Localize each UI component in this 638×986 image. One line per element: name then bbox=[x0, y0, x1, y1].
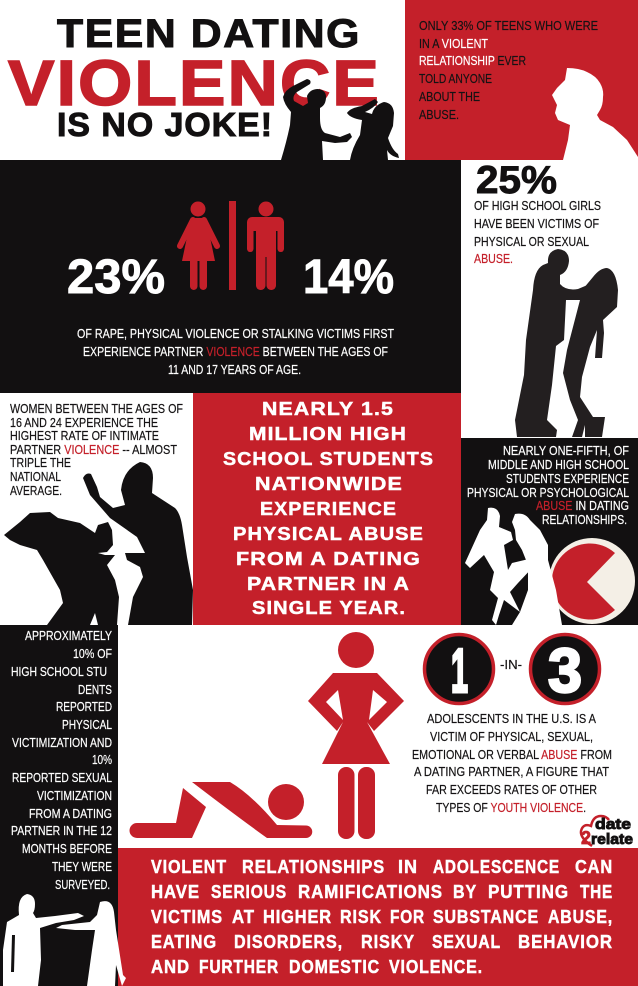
text: violent relationships conclusion: SEXUAL bbox=[432, 931, 501, 952]
text: violent relationships conclusion: DOMESTIC bbox=[289, 956, 380, 977]
text: approximately 10 percent bbox=[11, 629, 113, 892]
panel: 25 percent of girls bbox=[474, 159, 618, 437]
panel: conclusion bbox=[118, 848, 638, 986]
text: approximately 10 percent: 10% bbox=[92, 753, 112, 767]
text: violent relationships conclusion: VIOLENCE. bbox=[389, 956, 483, 977]
text: violent relationships conclusion: RAMIFICATIONS bbox=[298, 881, 443, 902]
text: approximately 10 percent: PHYSICAL bbox=[62, 718, 112, 732]
text: first experience ages: 11 AND 17 YEARS OF AGE. bbox=[168, 363, 301, 377]
divider bar bbox=[229, 201, 236, 290]
text: violent relationships conclusion: VICTIMS bbox=[151, 906, 223, 927]
text: only 33 percent told: IN A VIOLENT bbox=[419, 37, 488, 51]
silhouette: man grabbing woman bbox=[515, 249, 600, 437]
text: 1.5 million students: NEARLY 1.5 bbox=[262, 398, 394, 419]
text: violent relationships conclusion: HAVE bbox=[151, 881, 200, 902]
icon: standing woman bbox=[308, 632, 404, 839]
heading: teen dating: TEEN DATING bbox=[57, 12, 361, 56]
text: violent relationships conclusion: CAN bbox=[575, 856, 613, 877]
text: violent relationships conclusion: DISORDERS, bbox=[234, 931, 343, 952]
text: violent relationships conclusion: RELATIONSHIPS bbox=[242, 856, 385, 877]
text: adolescents: TYPES OF YOUTH VIOLENCE. bbox=[436, 801, 586, 815]
text: 1.5 million students: FROM A DATING bbox=[236, 548, 421, 569]
silhouette: man striking bbox=[83, 462, 193, 625]
logo: date2relate bbox=[581, 816, 633, 848]
panel: only 33 percent bbox=[405, 0, 638, 160]
text: violent relationships conclusion: AT bbox=[232, 906, 255, 927]
text: violent relationships conclusion: SERIOUS bbox=[211, 881, 287, 902]
text: 1.5 million students: SCHOOL STUDENTS bbox=[223, 448, 434, 469]
text: only 33 percent told: ABUSE. bbox=[419, 108, 459, 122]
panel: women 16 to 24 bbox=[4, 402, 193, 625]
text: approximately 10 percent: VICTIMIZATION bbox=[37, 789, 112, 803]
text: violent relationships conclusion: RISKY bbox=[361, 931, 415, 952]
logo: date2relate: relate bbox=[591, 831, 633, 848]
text: violent relationships conclusion: VIOLENT bbox=[151, 856, 227, 877]
text: violent relationships conclusion: AND bbox=[151, 956, 190, 977]
text: high school girls bbox=[474, 199, 601, 266]
silhouette: woman recoiling bbox=[4, 512, 119, 625]
text: 1.5 million students: PHYSICAL ABUSE bbox=[233, 523, 424, 544]
text: 1.5 million students bbox=[223, 398, 434, 618]
text: women between ages: HIGHEST RATE OF INTIMATE bbox=[10, 429, 159, 443]
text: approximately 10 percent: REPORTED bbox=[56, 700, 112, 714]
text: approximately 10 percent: APPROXIMATELY bbox=[25, 629, 113, 643]
text: women between ages bbox=[10, 402, 183, 498]
text: first experience ages: OF RAPE, PHYSICAL VIOLENCE OR STALKING VICTIMS FIRST bbox=[77, 327, 394, 341]
text: only 33 percent told: TOLD ANYONE bbox=[419, 72, 492, 86]
text: adolescents: A DATING PARTNER, A FIGURE THAT bbox=[414, 765, 609, 779]
text: 1.5 million students: PARTNER IN A bbox=[247, 573, 410, 594]
text: women between ages: AVERAGE. bbox=[10, 484, 62, 498]
label: in: -IN- bbox=[500, 658, 522, 672]
text: violent relationships conclusion: BEHAVIOR bbox=[518, 931, 613, 952]
icon: number 1 badge bbox=[424, 634, 494, 706]
text: approximately 10 percent: 10% OF bbox=[73, 647, 112, 661]
text: approximately 10 percent: PARTNER IN THE 12 bbox=[11, 824, 112, 838]
text: violent relationships conclusion: EATING bbox=[151, 931, 217, 952]
text: only 33 percent told bbox=[419, 19, 598, 122]
text: one fifth students bbox=[467, 444, 629, 527]
heading: is no joke: IS NO JOKE! bbox=[57, 106, 273, 143]
text: only 33 percent told: RELATIONSHIP EVER bbox=[419, 54, 526, 68]
text: violent relationships conclusion bbox=[151, 856, 613, 977]
text: high school girls: HAVE BEEN VICTIMS OF bbox=[474, 217, 599, 231]
icon: number 3 badge bbox=[530, 634, 600, 706]
silhouette: fighting couple bbox=[465, 508, 562, 625]
text: violent relationships conclusion: THE bbox=[580, 881, 613, 902]
text: adolescents: ADOLESCENTS IN THE U.S. IS A bbox=[427, 712, 597, 726]
text: 1.5 million students: SINGLE YEAR. bbox=[252, 597, 406, 618]
silhouette: man in profile bbox=[552, 68, 638, 160]
text: adolescents: EMOTIONAL OR VERBAL ABUSE FROM bbox=[412, 748, 612, 762]
text: one fifth students: ABUSE IN DATING bbox=[536, 499, 629, 513]
panel: nearly 1.5 million bbox=[193, 393, 461, 625]
logo: date2relate: date bbox=[595, 816, 631, 833]
text: violent relationships conclusion: PUTTING bbox=[488, 881, 569, 902]
text: approximately 10 percent: REPORTED SEXUAL bbox=[12, 771, 112, 785]
panel: one fifth bbox=[461, 438, 638, 625]
stat: 23 percent: 23% bbox=[67, 251, 165, 304]
text: approximately 10 percent: MONTHS BEFORE bbox=[22, 842, 112, 856]
heading: violence: VIOLENCE bbox=[8, 47, 381, 119]
text: violent relationships conclusion: IN bbox=[398, 856, 418, 877]
text: first experience ages: EXPERIENCE PARTNER VIOLENCE BETWEEN THE AGES OF bbox=[83, 345, 388, 359]
silhouette: arguing couple pointing bbox=[3, 894, 126, 986]
text: 1.5 million students: NATIONWIDE bbox=[255, 473, 403, 494]
text: women between ages: PARTNER VIOLENCE -- ALMOST bbox=[10, 443, 177, 457]
text: high school girls: ABUSE. bbox=[474, 252, 513, 266]
logo: date2relate: 2 bbox=[581, 828, 591, 848]
icon: woman bbox=[180, 202, 217, 290]
text: approximately 10 percent: HIGH SCHOOL STU bbox=[11, 665, 107, 679]
text: approximately 10 percent: THEY WERE bbox=[52, 860, 112, 874]
stat: 25 percent: 25% bbox=[476, 159, 557, 202]
panel: left column 10 percent bbox=[0, 625, 118, 986]
text: only 33 percent told: ONLY 33% OF TEENS WHO WERE bbox=[419, 19, 598, 33]
text: approximately 10 percent: SURVEYED. bbox=[55, 878, 110, 892]
silhouette: attacking man bbox=[281, 79, 352, 160]
stat: 14 percent: 14% bbox=[303, 251, 394, 304]
panel: title bbox=[8, 12, 399, 160]
icon: number 3 badge: 3 bbox=[548, 637, 582, 706]
text: first experience ages bbox=[77, 327, 394, 377]
text: violent relationships conclusion: ABUSE, bbox=[548, 906, 613, 927]
text: adolescents: VICTIM OF PHYSICAL, SEXUAL, bbox=[430, 730, 593, 744]
text: approximately 10 percent: FROM A DATING bbox=[29, 807, 112, 821]
icon: number 1 badge: 1 bbox=[451, 637, 468, 706]
text: approximately 10 percent: DENTS bbox=[78, 683, 112, 697]
text: violent relationships conclusion: SUBSTANCE bbox=[433, 906, 539, 927]
silhouette: woman bbox=[563, 268, 618, 437]
text: high school girls: OF HIGH SCHOOL GIRLS bbox=[474, 199, 601, 213]
text: 1.5 million students: EXPERIENCE bbox=[260, 498, 397, 519]
icon: fallen person bbox=[130, 782, 312, 838]
text: women between ages: TRIPLE THE bbox=[10, 456, 71, 470]
text: high school girls: PHYSICAL OR SEXUAL bbox=[474, 235, 589, 249]
text: violent relationships conclusion: RISK bbox=[340, 906, 382, 927]
text: only 33 percent told: ABOUT THE bbox=[419, 90, 480, 104]
text: violent relationships conclusion: FURTHER bbox=[199, 956, 279, 977]
text: violent relationships conclusion: HIGHER bbox=[263, 906, 332, 927]
text: violent relationships conclusion: BY bbox=[453, 881, 477, 902]
text: women between ages: NATIONAL bbox=[10, 470, 61, 484]
text: women between ages: WOMEN BETWEEN THE AGES OF bbox=[10, 402, 183, 416]
text: violent relationships conclusion: ADOLESCENCE bbox=[433, 856, 560, 877]
silhouette: cowering woman bbox=[347, 99, 399, 160]
text: adolescents bbox=[412, 712, 612, 815]
pie chart: one fifth bbox=[549, 538, 635, 624]
text: approximately 10 percent: VICTIMIZATION AND bbox=[12, 736, 112, 750]
text: 1.5 million students: MILLION HIGH bbox=[249, 423, 407, 444]
panel: gender statistics bbox=[0, 160, 461, 393]
text: violent relationships conclusion: FOR bbox=[390, 906, 425, 927]
icon: man bbox=[247, 202, 284, 290]
text: adolescents: FAR EXCEEDS RATES OF OTHER bbox=[426, 783, 597, 797]
text: women between ages: 16 AND 24 EXPERIENCE THE bbox=[10, 416, 158, 430]
